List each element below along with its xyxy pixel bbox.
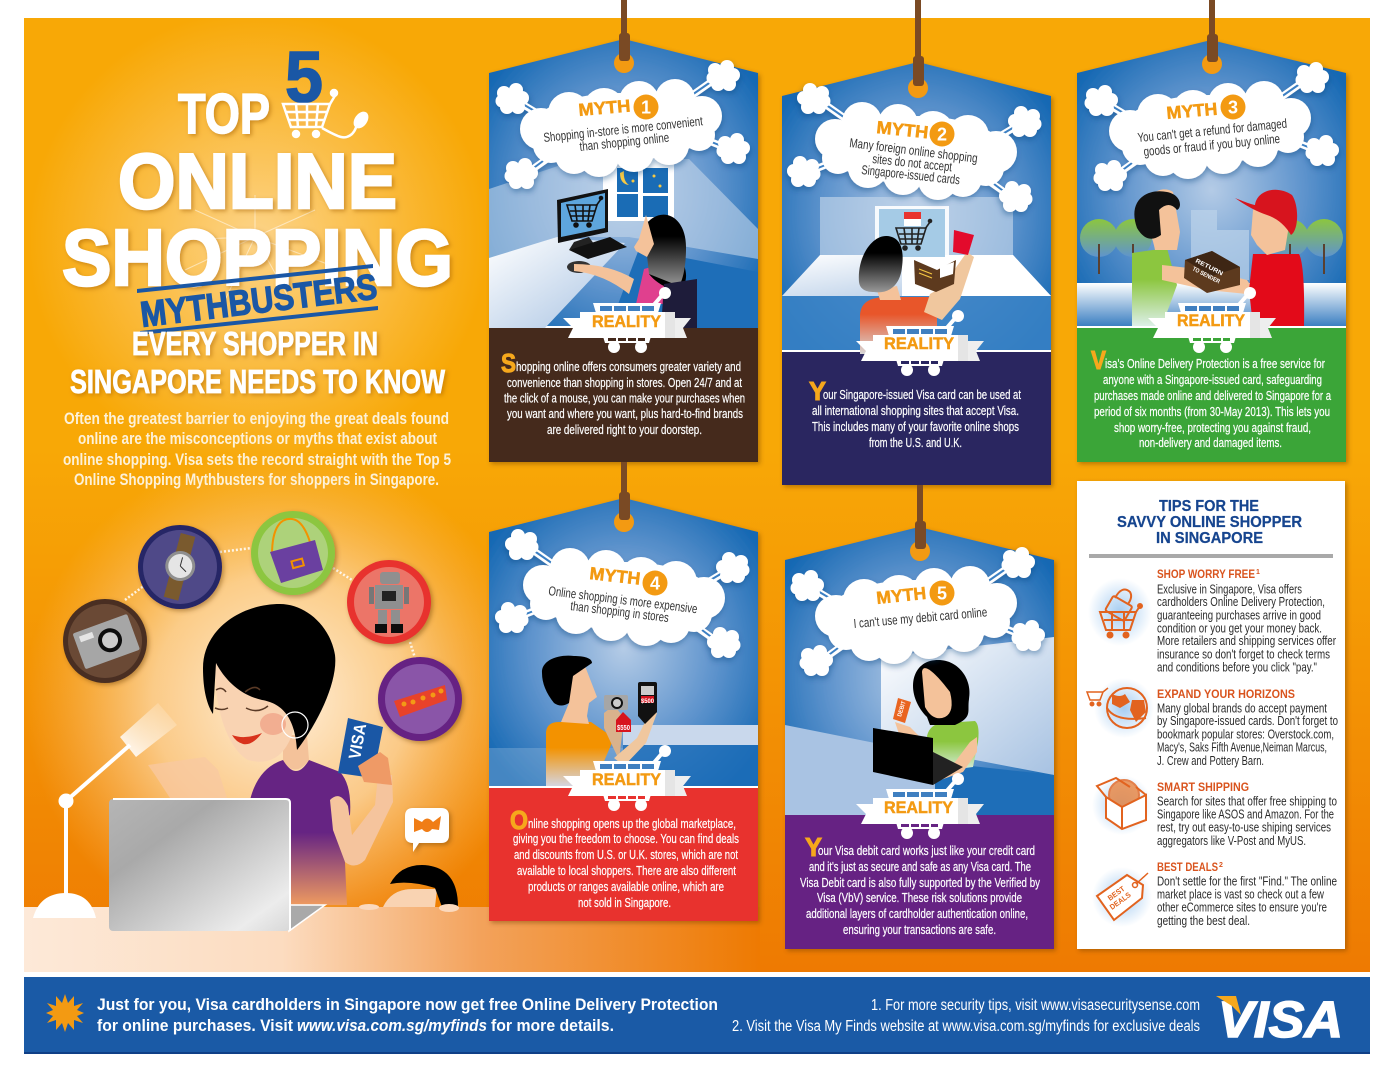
cloud text: MYTH bbox=[1166, 99, 1218, 123]
price comparison scene: $500 bbox=[641, 699, 655, 705]
reality text bbox=[510, 805, 739, 910]
tag card bbox=[782, 62, 1051, 485]
tips card bbox=[1077, 481, 1345, 949]
icon: best deals tag bbox=[1092, 867, 1152, 927]
tips heading: SAVVY ONLINE SHOPPER bbox=[1117, 514, 1302, 531]
reality badge bbox=[563, 745, 691, 811]
tips heading bbox=[1117, 498, 1302, 547]
candy speech bubble bbox=[405, 808, 449, 852]
icon: starburst bbox=[46, 994, 84, 1032]
refund scene bbox=[1077, 189, 1346, 326]
tip 1 text: Exclusive in Singapore, Visa offers bbox=[1157, 582, 1302, 596]
tip 4 text: other eCommerce sites to ensure you're bbox=[1157, 901, 1327, 915]
reality text: our Visa debit card works just like your credit card bbox=[818, 843, 1035, 858]
illustration: lamp bbox=[33, 703, 177, 918]
reality text bbox=[1091, 345, 1332, 450]
reality text: Y bbox=[805, 832, 822, 862]
illustration: woman with card bbox=[148, 604, 393, 905]
cloud bbox=[495, 529, 750, 658]
rope and eyelet bbox=[1202, 0, 1222, 74]
visa logo: VISA bbox=[1218, 991, 1343, 1048]
shirt bbox=[248, 760, 350, 905]
reality text: S bbox=[501, 348, 516, 378]
reality text: and discounts from U.S. or U.K. stores, which are not bbox=[514, 847, 738, 862]
left hand bbox=[148, 757, 227, 798]
tips heading: IN SINGAPORE bbox=[1156, 530, 1263, 547]
icon: camera circle bbox=[63, 599, 147, 683]
earring bbox=[282, 712, 308, 738]
reality text: from the U.S. and U.K. bbox=[869, 435, 962, 450]
icon: lock and cart bbox=[1088, 578, 1152, 646]
tip 1 text: condition or you get your money back. bbox=[1157, 621, 1322, 635]
offer text: for more details. bbox=[491, 1017, 614, 1035]
offer text bbox=[97, 996, 718, 1035]
tip 4 text bbox=[1157, 860, 1337, 928]
tip 1 text: insurance so don't forget to check terms bbox=[1157, 647, 1330, 661]
debit card scene bbox=[785, 637, 1054, 815]
cloud text bbox=[1137, 94, 1288, 159]
reality text: available to local shoppers. There are also different bbox=[517, 863, 736, 878]
illustration: laptop bbox=[109, 799, 325, 931]
reality text bbox=[800, 832, 1040, 937]
cloud text: MYTH bbox=[876, 117, 929, 142]
cloud bbox=[496, 60, 750, 189]
reality text bbox=[501, 348, 745, 437]
reality text: ensuring your transactions are safe. bbox=[843, 922, 996, 937]
offer text: Just for you, Visa cardholders in Singapore now get free Online Delivery Protection bbox=[97, 996, 718, 1014]
reality text: the click of a mouse, you can make your purchases when bbox=[504, 390, 745, 406]
intro paragraph: Online Shopping Mythbusters for shoppers in Singapore. bbox=[74, 470, 439, 489]
reality text bbox=[809, 376, 1021, 450]
card bbox=[338, 718, 383, 778]
tag card bbox=[489, 498, 758, 921]
rope and eyelet bbox=[908, 0, 928, 98]
reality text: all international shopping sites that accept Visa. bbox=[812, 403, 1019, 418]
illustration: child peeking bbox=[359, 865, 459, 912]
tip 4 text: Don't settle for the first "Find." The online bbox=[1157, 875, 1337, 889]
footnotes: 1. For more security tips, visit www.visasecuritysense.com bbox=[871, 997, 1200, 1014]
refund scene: TO SENDER bbox=[1191, 266, 1221, 286]
tip 3 text: aggregators like V-Post and MyUS. bbox=[1157, 834, 1306, 848]
reality text: hopping online offers consumers greater variety and bbox=[516, 359, 741, 374]
title block bbox=[62, 38, 453, 400]
tip 2 text bbox=[1157, 687, 1338, 768]
icon: robot circle bbox=[347, 560, 431, 644]
reality text: our Singapore-issued Visa card can be used at bbox=[823, 387, 1021, 402]
reality badge: REALITY bbox=[884, 334, 955, 353]
myth tag 5 bbox=[785, 485, 1054, 949]
cloud text: MYTH bbox=[875, 583, 927, 608]
icon: bow circle bbox=[378, 657, 462, 741]
price comparison scene bbox=[489, 656, 758, 786]
dotted connectors bbox=[125, 548, 415, 658]
tip 4 text: market place is vast so check out a few bbox=[1157, 887, 1325, 901]
tip 4 text: BEST DEALS bbox=[1157, 860, 1218, 874]
reality text: Visa Debit card is also fully supported by the Verified by bbox=[800, 875, 1040, 890]
eyes bbox=[215, 687, 268, 711]
icon: best deals tag: BEST bbox=[1106, 884, 1127, 903]
icon: best deals tag: DEALS bbox=[1108, 890, 1133, 912]
reality badge bbox=[856, 310, 984, 376]
rope and eyelet bbox=[910, 485, 930, 561]
cloud text bbox=[548, 563, 698, 625]
subheading line 1: EVERY SHOPPER IN bbox=[132, 325, 378, 362]
footnotes: 2. Visit the Visa My Finds website at www.visa.com.sg/myfinds for exclusive deals bbox=[732, 1018, 1200, 1035]
icon: globe and cart bbox=[1087, 678, 1154, 738]
cloud text: MYTH bbox=[578, 96, 631, 120]
reality text: convenience than shopping in stores. Open 24/7 and at bbox=[507, 375, 742, 390]
reality badge bbox=[1148, 287, 1276, 353]
title glow bbox=[28, 10, 488, 470]
intro paragraph: Often the greatest barrier to enjoying the great deals found bbox=[64, 409, 449, 428]
cloud bbox=[1084, 62, 1339, 191]
cloud text: 5 bbox=[937, 584, 947, 604]
illustration glow bbox=[36, 461, 489, 907]
tip 2 text: EXPAND YOUR HORIZONS bbox=[1157, 687, 1295, 701]
reality text: and it's just as secure and safe as any Visa card. The bbox=[809, 859, 1031, 874]
hand bbox=[358, 752, 392, 785]
price comparison scene: $550 bbox=[617, 725, 630, 732]
reality text: additional layers of cardholder authentication online, bbox=[806, 906, 1028, 921]
tip 3 text: SMART SHIPPING bbox=[1157, 780, 1249, 794]
reality text: non-delivery and damaged items. bbox=[1139, 435, 1282, 450]
reality badge bbox=[563, 287, 691, 353]
tip 4 text: 2 bbox=[1219, 862, 1223, 869]
tip 1 text: 1 bbox=[1256, 569, 1260, 576]
cloud text: than shopping online bbox=[579, 130, 670, 154]
cloud text: 1 bbox=[641, 98, 651, 118]
cloud bbox=[787, 83, 1042, 212]
desk scene bbox=[489, 159, 758, 328]
tip 2 text: bookmark popular stores: Overstock.com, bbox=[1157, 727, 1334, 741]
reality text: giving you the freedom to choose. You can find deals bbox=[513, 831, 739, 846]
desk bbox=[24, 907, 760, 972]
face bbox=[215, 660, 300, 762]
reality text: not sold in Singapore. bbox=[578, 895, 671, 910]
cloud text: Shopping in-store is more convenient bbox=[543, 113, 704, 145]
cloud text: 2 bbox=[937, 124, 947, 144]
reality badge: REALITY bbox=[1177, 311, 1246, 330]
cloud text: MYTH bbox=[589, 563, 641, 589]
reality text: are delivered right to your doorstep. bbox=[547, 422, 702, 437]
reality text: shop worry-free, protecting you against fraud, bbox=[1114, 420, 1311, 435]
tip 1 text: and conditions before you click "pay." bbox=[1157, 660, 1317, 674]
reality text: products or ranges available online, which are bbox=[528, 879, 724, 894]
hair bbox=[203, 604, 335, 750]
icon: box with globe bbox=[1092, 775, 1152, 835]
cloud text bbox=[849, 117, 979, 187]
subheading line 2: SINGAPORE NEEDS TO KNOW bbox=[70, 363, 446, 400]
tag card bbox=[489, 39, 758, 462]
tip 1 text bbox=[1157, 567, 1336, 674]
tip 2 text: by Singapore-issued cards. Don't forget to bbox=[1157, 714, 1338, 728]
tip 2 text: Macy's, Saks Fifth Avenue,Neiman Marcus, bbox=[1157, 741, 1327, 755]
footer banner bbox=[24, 977, 1370, 1054]
tips heading: TIPS FOR THE bbox=[1159, 498, 1259, 515]
icon: watch circle bbox=[138, 525, 222, 609]
tag card bbox=[1077, 40, 1346, 462]
myth tag 4 bbox=[489, 462, 758, 921]
wallet scene bbox=[782, 197, 1051, 354]
tip 2 text: J. Crew and Pottery Barn. bbox=[1157, 754, 1264, 768]
blush bbox=[260, 713, 286, 735]
cloud text: goods or fraud if you buy online bbox=[1143, 131, 1281, 159]
reality text: V bbox=[1091, 345, 1107, 375]
mythbusters stamp: MYTHBUSTERS bbox=[138, 266, 379, 335]
cloud text: sites do not accept bbox=[872, 151, 953, 174]
numeral 5: 5 bbox=[285, 38, 323, 118]
cloud text: Singapore-issued cards bbox=[861, 162, 961, 187]
cloud text: 3 bbox=[1228, 98, 1238, 118]
myth tag 2 bbox=[782, 0, 1051, 485]
tip 2 text: Many global brands do accept payment bbox=[1157, 701, 1327, 715]
cloud text: Online shopping is more expensive bbox=[548, 583, 698, 616]
reality text: Y bbox=[809, 376, 826, 406]
offer text: for online purchases. Visit bbox=[97, 1017, 293, 1035]
tip 1 text: cardholders Online Delivery Protection, bbox=[1157, 595, 1325, 609]
cloud text: Many foreign online shopping bbox=[849, 135, 979, 166]
lips bbox=[232, 733, 262, 744]
heading: top: TOP bbox=[178, 82, 270, 146]
tip 1 text: More retailers and shipping services offer bbox=[1157, 634, 1336, 648]
tip 3 text bbox=[1157, 780, 1337, 848]
reality text: isa's Online Delivery Protection is a free service for bbox=[1105, 356, 1325, 371]
reality text: Visa (VbV) service. These risk solutions provide bbox=[817, 890, 1022, 905]
cloud text: than shopping in stores bbox=[570, 598, 670, 625]
tip 3 text: Singapore like ASOS and Amazon. For the bbox=[1157, 807, 1334, 821]
reality text: This includes many of your favorite online shops bbox=[812, 419, 1019, 434]
intro paragraph: online are the misconceptions or myths that exist about bbox=[78, 429, 437, 448]
reality text: anyone with a Singapore-issued card, safeguarding bbox=[1103, 372, 1322, 387]
cloud text bbox=[853, 580, 988, 631]
rope and eyelet bbox=[614, 462, 634, 532]
tip 1 text: guaranteeing purchases arrive in good bbox=[1157, 608, 1321, 622]
tip 3 text: rest, try out easy-to-use shiping services bbox=[1157, 821, 1331, 835]
heading: shopping: SHOPPING bbox=[62, 213, 453, 302]
offer text: www.visa.com.sg/myfinds bbox=[297, 1017, 487, 1035]
cloud bbox=[790, 547, 1045, 676]
reality text: nline shopping opens up the global marketplace, bbox=[528, 816, 736, 831]
reality badge: REALITY bbox=[592, 312, 662, 331]
arm holding card bbox=[330, 775, 393, 866]
decorative sun rays behind title bbox=[170, 195, 330, 300]
refund scene: RETURN bbox=[1194, 258, 1224, 277]
intro paragraph bbox=[63, 409, 451, 489]
panel: tips bbox=[1077, 481, 1345, 949]
footnotes bbox=[732, 997, 1200, 1035]
tip 4 text: getting the best deal. bbox=[1157, 914, 1250, 928]
tag card bbox=[785, 527, 1054, 949]
cloud text: You can't get a refund for damaged bbox=[1137, 116, 1288, 145]
myth tag 3 bbox=[1077, 0, 1346, 462]
rope and eyelet bbox=[614, 0, 634, 73]
icon: handbag circle bbox=[251, 511, 335, 595]
myth tag 1 bbox=[489, 0, 758, 462]
tip 1 text: SHOP WORRY FREE bbox=[1157, 567, 1255, 581]
reality badge bbox=[856, 773, 984, 839]
reality text: O bbox=[510, 805, 528, 835]
reality badge: REALITY bbox=[592, 770, 662, 789]
reality badge: REALITY bbox=[884, 798, 954, 817]
intro paragraph: online shopping. Visa sets the record straight with the Top 5 bbox=[63, 450, 451, 469]
tip 3 text: Search for sites that offer free shipping to bbox=[1157, 795, 1337, 809]
neck bbox=[283, 735, 309, 770]
debit card scene: DEBIT bbox=[897, 700, 908, 718]
icon: shopping cart with mouse cable bbox=[283, 90, 370, 137]
card: VISA bbox=[345, 722, 370, 761]
cloud text: 4 bbox=[650, 574, 660, 594]
cloud text bbox=[543, 94, 704, 154]
heading: online: ONLINE bbox=[118, 137, 397, 225]
cloud text: I can't use my debit card online bbox=[853, 604, 988, 631]
reality text: you want and where you want, plus hard-to-find brands bbox=[507, 406, 743, 421]
